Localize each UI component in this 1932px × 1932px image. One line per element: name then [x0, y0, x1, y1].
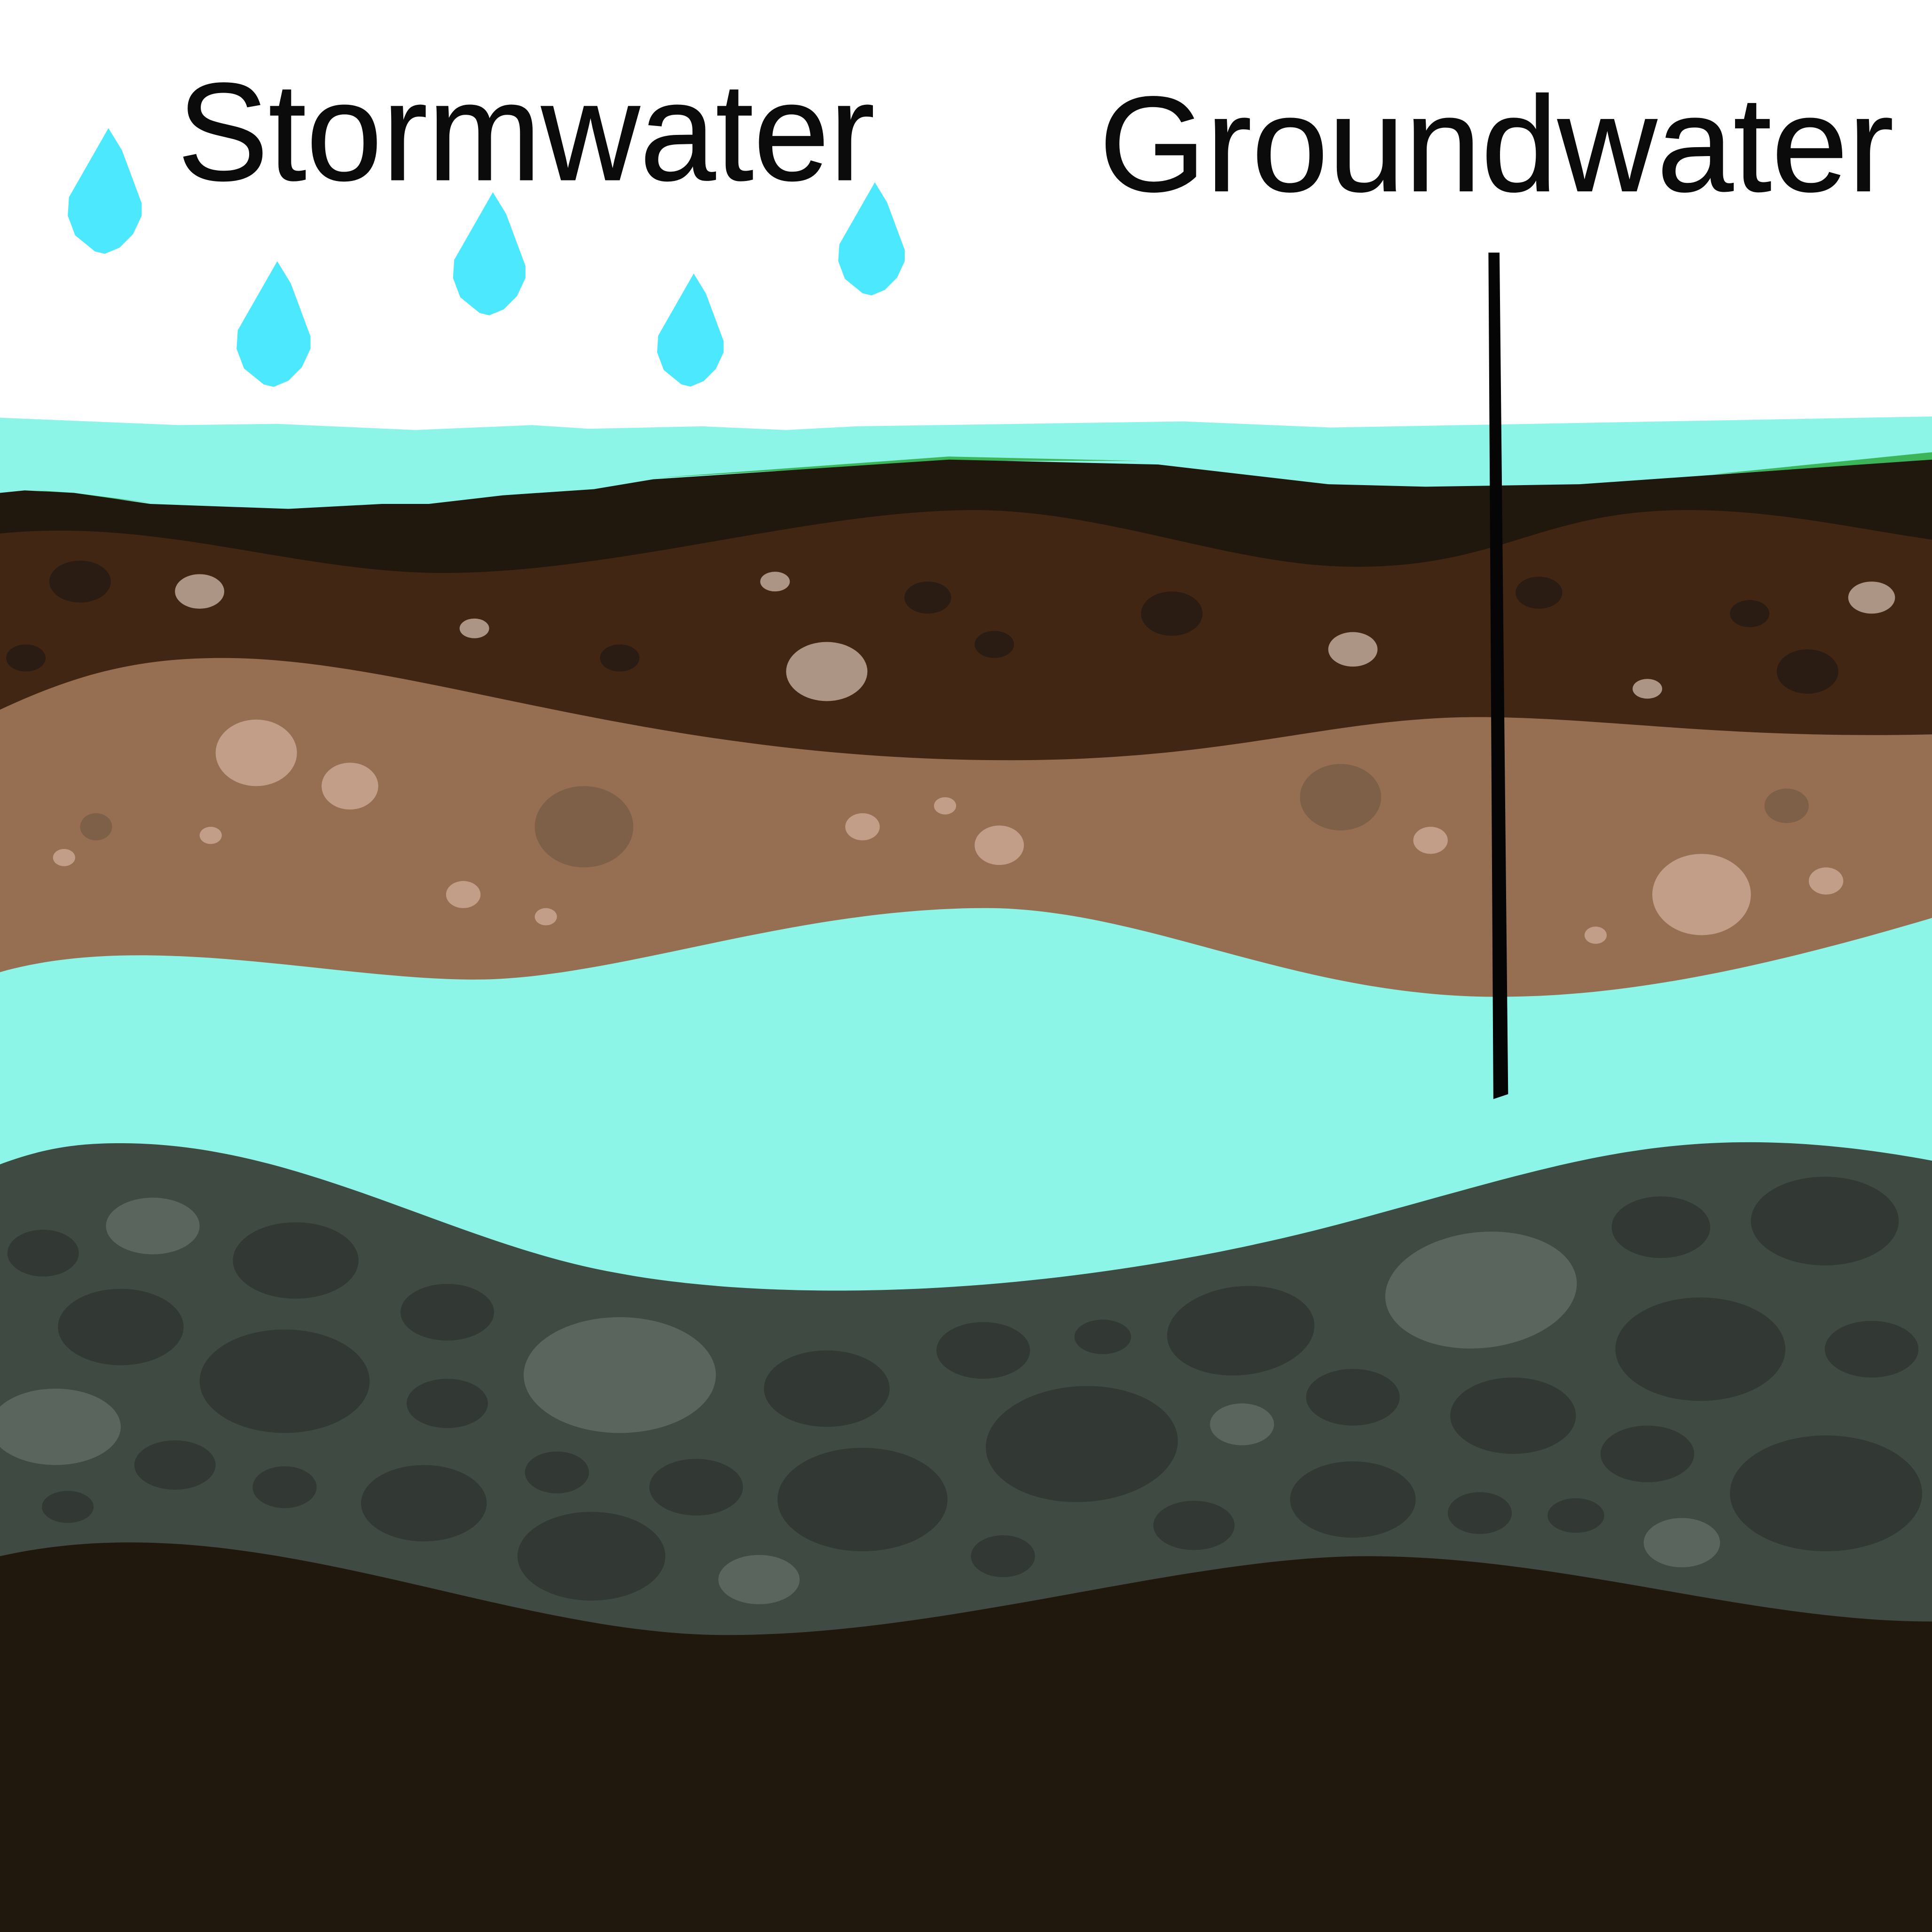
raindrops: [68, 128, 905, 387]
well pipe: [1488, 252, 1508, 1099]
gravel stones: [0, 1177, 1922, 1604]
layer: gray gravel: [0, 1142, 1932, 1725]
stones in brown soil: [6, 561, 1895, 701]
layer: surface stormwater and aquifer water: [0, 416, 1932, 1355]
layer: light brown soil: [0, 658, 1932, 997]
title: Stormwater: Stormwater: [177, 54, 875, 210]
layer: brown soil: [0, 510, 1932, 863]
layer: thin green grass slivers: [37, 452, 1932, 503]
layer: dark topsoil: [0, 460, 1932, 739]
stones in light brown soil: [53, 720, 1843, 944]
layer: bedrock: [0, 1542, 1932, 1932]
title: Groundwater: Groundwater: [1099, 69, 1894, 220]
